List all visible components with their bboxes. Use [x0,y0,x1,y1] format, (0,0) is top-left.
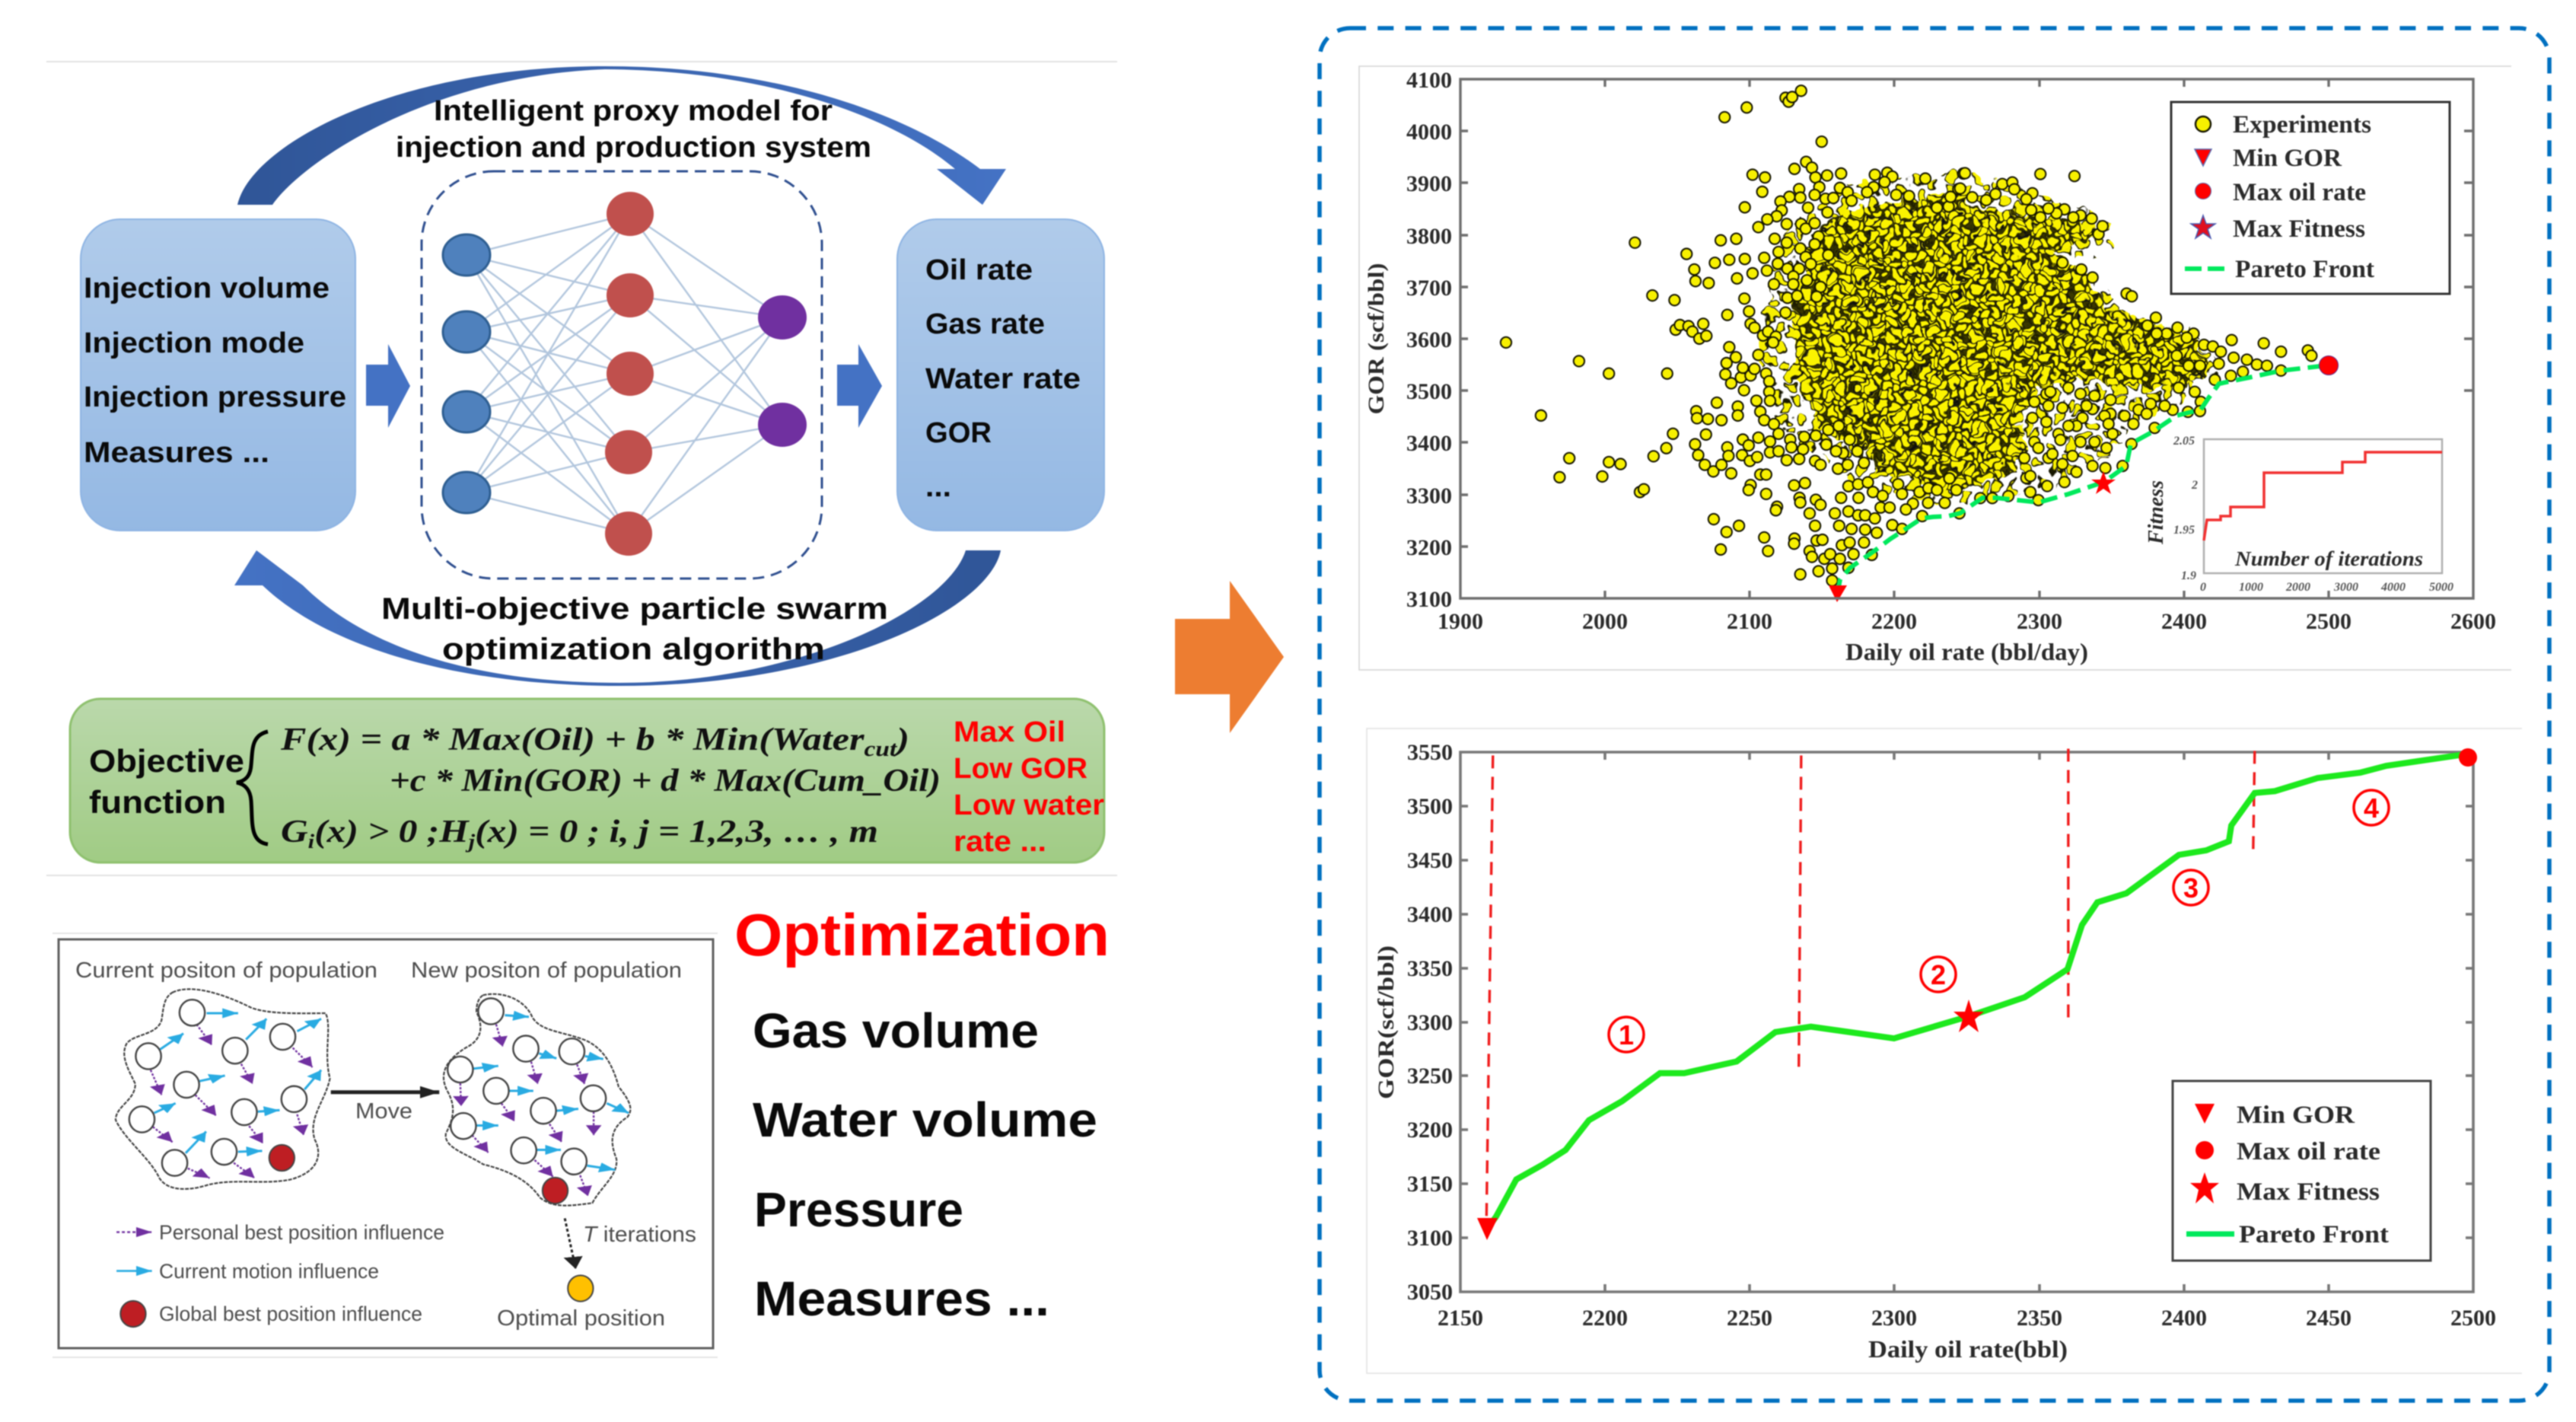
heading: swarm algorithm [381,592,888,666]
panel: inputs box: Measures ... [84,437,269,469]
axis titles: Daily oil rate (bbl/day) [1845,638,2088,665]
formula: j [465,831,476,853]
arrow: iterations [565,1218,576,1269]
y axis labels: 3450 [1407,848,1453,873]
x axis labels: 2200 [1871,609,1917,634]
optimization variables list: Pressure [754,1182,963,1237]
y axis labels: 3600 [1406,327,1452,352]
x axis labels: 2350 [2017,1306,2062,1331]
formula: F(x) = a * Max(Oil) + b * Min(Water [281,722,769,757]
stage labels: 2 [1931,959,1946,990]
x axis labels: 2300 [2017,609,2062,634]
axis titles [1364,263,2088,665]
objective function label: Objective [89,743,244,779]
objectives in red: Low GOR [954,753,1087,785]
y axis labels: 3350 [1407,956,1453,981]
y axis labels: 3150 [1407,1172,1453,1197]
marker: max oil rate [2459,748,2477,767]
y axis labels: 3550 [1407,740,1453,765]
formula: i [308,831,315,853]
heading: swarm algorithm: optimization algorithm [442,633,825,666]
x axis labels: 1900 [1438,609,1483,634]
heading: proxy model: injection and production system [396,132,871,164]
formula: +c * Min(GOR) + d * Max(Cum_Oil) [390,764,941,799]
x axis labels: 2100 [1727,609,1772,634]
y axis labels: 3400 [1407,902,1453,927]
panel: outputs box [897,219,1104,531]
y axis labels [1406,68,1452,612]
x axis labels: 2400 [2161,1306,2207,1331]
arrow: move [331,1090,439,1094]
x axis labels [1438,609,2496,634]
x axis labels: 2450 [2306,1306,2352,1331]
scatter: cluster halo and dense core [1758,171,2226,502]
panel: inputs box: Injection mode [84,327,304,359]
swarm headings: Current positon of population [75,958,377,983]
pareto front dashed [1837,365,2327,595]
inset: fitness chart: Fitness [2145,480,2168,545]
swarm headings [75,958,682,983]
heading: swarm algorithm: Multi-objective particle swarm [381,592,888,626]
objectives in red: rate ... [954,826,1046,858]
x axis labels: 2300 [1871,1306,1917,1331]
inset: fitness chart: 4000 [2380,581,2406,594]
objectives in red: Low water [954,789,1104,821]
y axis labels: 3200 [1407,1118,1453,1143]
y axis labels: 3100 [1406,587,1452,612]
stage labels: 3 [2183,872,2199,904]
legend: Max Fitness [2237,1178,2380,1206]
arrow: input to network [366,344,410,428]
inset: fitness chart: 0 [2200,581,2206,594]
inset: fitness chart: 1000 [2239,581,2263,594]
swarm labels: Move [355,1099,412,1124]
panel: outputs box: Oil rate [925,254,1033,286]
legend [2173,1081,2431,1261]
objectives in red [954,716,1104,858]
x axis labels: 2250 [1727,1306,1772,1331]
pareto front line [1488,754,2467,1228]
y axis labels: 3500 [1406,379,1452,404]
legend: Max oil rate [2233,179,2366,206]
objective function label [89,743,244,820]
stage labels: 1 [1619,1019,1634,1051]
stage dividers [1486,748,2255,1219]
optimal position marker [568,1275,594,1302]
arrow: bottom curved arrow [234,550,1001,686]
y axis labels: 3300 [1407,1010,1453,1035]
axis titles [1374,945,2068,1363]
scatter: right experiments [1954,167,2316,518]
inset: fitness chart: 2000 [2285,581,2310,594]
inset: fitness chart [2145,435,2453,594]
legend: Experiments [2233,111,2371,139]
formula: cut [865,738,898,761]
swarm labels: Current motion influence [159,1260,379,1283]
swarm labels: T iterations [583,1223,696,1247]
y axis labels: 3050 [1407,1280,1453,1305]
legend: global best marker [120,1301,146,1327]
formula: G [281,815,304,850]
y axis labels [1407,740,1453,1305]
y axis labels: 3200 [1406,535,1452,560]
stage labels: 4 [2364,792,2379,824]
x axis labels: 2500 [2306,609,2352,634]
inset: fitness chart: 1.95 [2173,524,2195,537]
optimization variables list: Gas volume [753,1003,1039,1058]
panel: inputs box: Injection pressure [84,381,346,413]
optimization variables list: Measures ... [754,1271,1049,1326]
y axis labels: 3300 [1406,483,1452,509]
panel: neural network [422,171,822,579]
legend: Min GOR [2237,1102,2355,1129]
swarm drawing [116,989,630,1327]
current population [116,989,330,1189]
y axis labels: 3700 [1406,276,1452,301]
swarm labels: Personal best position influence [159,1221,444,1244]
panel: scatter plot [1359,66,2511,670]
x axis labels: 2200 [1582,1306,1628,1331]
arrow: orange [1175,581,1284,733]
panel: outputs box: Gas rate [925,308,1045,340]
marker: min GOR [1829,585,1847,602]
heading: proxy model: Intelligent proxy model for [434,95,833,127]
panel: outputs box: Water rate [925,363,1081,395]
y axis labels: 3900 [1406,171,1452,196]
objective function label: function [89,784,226,820]
optimization variables list [753,1003,1097,1326]
legend: motion marker [116,1270,152,1272]
axis titles: Daily oil rate(bbl) [1868,1335,2068,1363]
chart frame and ticks [1460,752,2473,1292]
brace [237,732,268,844]
stage labels [1609,790,2389,1052]
inset: fitness chart: Number of iterations [2234,547,2423,570]
panel: proxy model diagram [81,66,1104,686]
x axis labels [1438,1306,2496,1331]
y axis labels: 3500 [1407,794,1453,819]
chart frame and ticks [1460,79,2473,598]
heading: proxy model [396,95,871,164]
inset: fitness chart: 2.05 [2173,435,2195,448]
new population [444,994,630,1206]
arrow: network to output [837,344,882,428]
x axis labels: 2150 [1438,1306,1483,1331]
marker: max fitness [1953,1000,1984,1032]
panel: objective function [70,699,1104,862]
formula: (x) > 0 ;H [314,815,470,850]
marker: max fitness [2091,471,2116,494]
x axis labels: 2000 [1582,609,1628,634]
swarm labels [159,1099,696,1331]
arrow: top curved arrow [237,66,1006,205]
axis titles: GOR (scf/bbl) [1364,263,1389,414]
objectives in red: Max Oil [954,716,1065,748]
legend: Pareto Front [2239,1221,2389,1248]
panel: inputs box: Injection volume [84,273,330,304]
legend: Pareto Front [2235,256,2374,283]
inset: fitness chart: 1.9 [2181,569,2196,582]
y axis labels: 4100 [1406,68,1452,93]
swarm labels: Global best position influence [159,1302,422,1325]
panel: outputs box: GOR [925,417,992,449]
panel: particle swarm diagram [53,933,718,1357]
inset: fitness chart: 2 [2191,479,2198,492]
panel: outputs box: ... [925,471,951,503]
optimization variables list: Water volume [753,1092,1097,1147]
y axis labels: 3250 [1407,1063,1453,1089]
legend [2171,102,2450,294]
swarm labels: Optimal position [497,1306,665,1331]
marker: max oil rate [2320,356,2338,375]
panel: pareto front chart [1367,729,2522,1373]
x axis labels: 2600 [2450,609,2496,634]
y axis labels: 4000 [1406,120,1452,145]
inset: fitness chart: 3000 [2333,581,2358,594]
marker: min GOR [1477,1218,1498,1240]
swarm headings: New positon of population [411,958,682,983]
y axis labels: 3400 [1406,431,1452,456]
axis titles: GOR(scf/bbl) [1374,945,1399,1099]
panel: dashed results frame [1320,28,2549,1401]
y axis labels: 3800 [1406,224,1452,249]
x axis labels: 2400 [2161,609,2207,634]
legend: personal best marker [116,1231,152,1233]
x axis labels: 2500 [2450,1306,2496,1331]
divider lines [46,62,1117,875]
inset: fitness chart: 5000 [2429,581,2453,594]
formula [280,722,941,853]
scatter: left experiments [1501,85,1969,586]
y axis labels: 3100 [1407,1226,1453,1251]
heading: optimization: Optimization [734,901,1110,968]
legend: Max Fitness [2233,215,2365,243]
formula: ) [893,722,909,757]
formula: (x) = 0 ; i, j = 1,2,3, … , m [475,815,878,850]
panel: inputs box [81,219,355,531]
legend: Min GOR [2233,145,2342,172]
legend: Max oil rate [2237,1138,2380,1165]
